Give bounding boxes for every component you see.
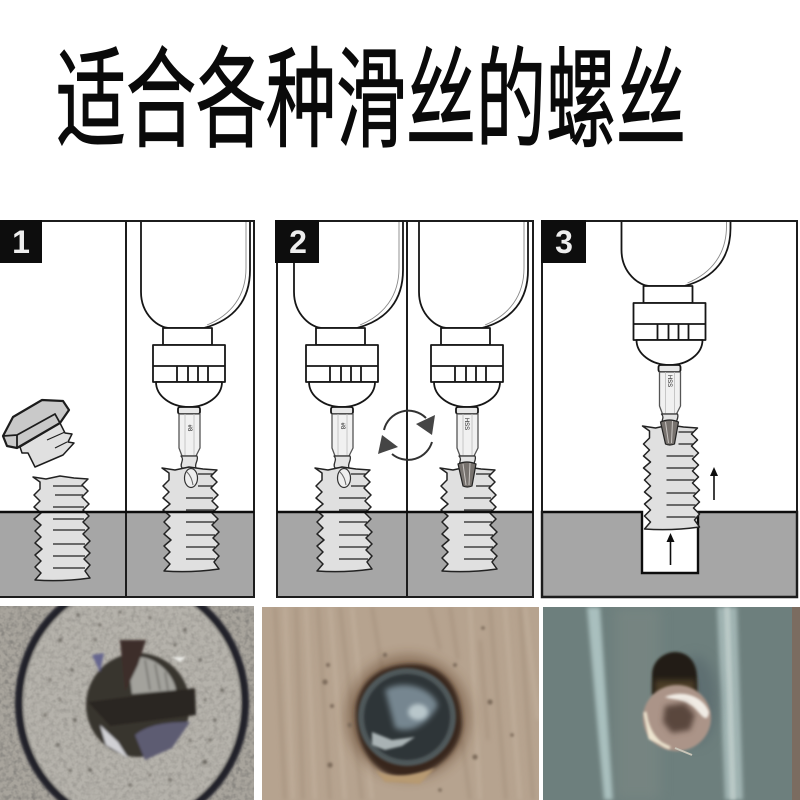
badge 1 bbox=[0, 220, 42, 263]
panel 1 drill bbox=[140, 222, 251, 468]
badge 2 bbox=[275, 220, 319, 263]
panel 2 background bbox=[277, 221, 533, 597]
panel 3 background bbox=[542, 221, 797, 597]
panel 2 left screw with drill bit bbox=[315, 467, 372, 572]
rotation arrows bbox=[378, 411, 435, 460]
panel 3 ground with hole bbox=[542, 512, 797, 597]
panel: step 1 bbox=[0, 220, 255, 598]
stripped recess in disc screw bbox=[86, 640, 196, 760]
panel 3 frame bbox=[542, 221, 797, 597]
panel 1 ground bbox=[0, 512, 254, 597]
photo: stripped screw in green metal bbox=[543, 607, 800, 800]
panel 3 drill bbox=[620, 222, 732, 421]
badge 1: 1 bbox=[12, 224, 30, 260]
arrow: screw moves up bbox=[710, 467, 718, 500]
panel 1 loose screw head bbox=[3, 400, 74, 467]
panel 2 frame bbox=[277, 221, 533, 597]
title: 适合各种滑丝的螺丝 bbox=[56, 40, 686, 162]
panel 3 extracted screw bbox=[642, 420, 700, 530]
panel 1 broken screw stub bbox=[33, 476, 90, 581]
panel: step 2 bbox=[275, 220, 534, 598]
panel 1 background bbox=[0, 221, 254, 597]
panel 1 ground line bbox=[0, 511, 254, 513]
badge 2: 2 bbox=[289, 224, 307, 260]
panel 2 right bit label: HSS bbox=[463, 418, 469, 430]
badge 3: 3 bbox=[555, 224, 573, 260]
panel 1 frame bbox=[0, 221, 254, 597]
panel 2 ground line bbox=[277, 511, 533, 513]
panel 2 right drill bbox=[418, 222, 529, 463]
panel 2 right screw with extractor bbox=[440, 462, 497, 572]
panel 3 bit label: HSS bbox=[666, 375, 672, 387]
panel 2 left bit label: #8 bbox=[339, 423, 345, 430]
panel 2 left drill bbox=[293, 222, 404, 468]
panel 2 ground bbox=[277, 512, 533, 597]
badge 3 bbox=[541, 220, 586, 263]
photo: stripped screw on grey disc bbox=[0, 606, 254, 800]
arrow: push up in hole bbox=[666, 533, 674, 565]
panel 1 drilled screw bbox=[162, 467, 219, 572]
photo: stripped screw in wood bbox=[262, 607, 539, 800]
panel 1 bit label: #8 bbox=[186, 425, 192, 432]
panel: step 3 bbox=[540, 220, 798, 598]
